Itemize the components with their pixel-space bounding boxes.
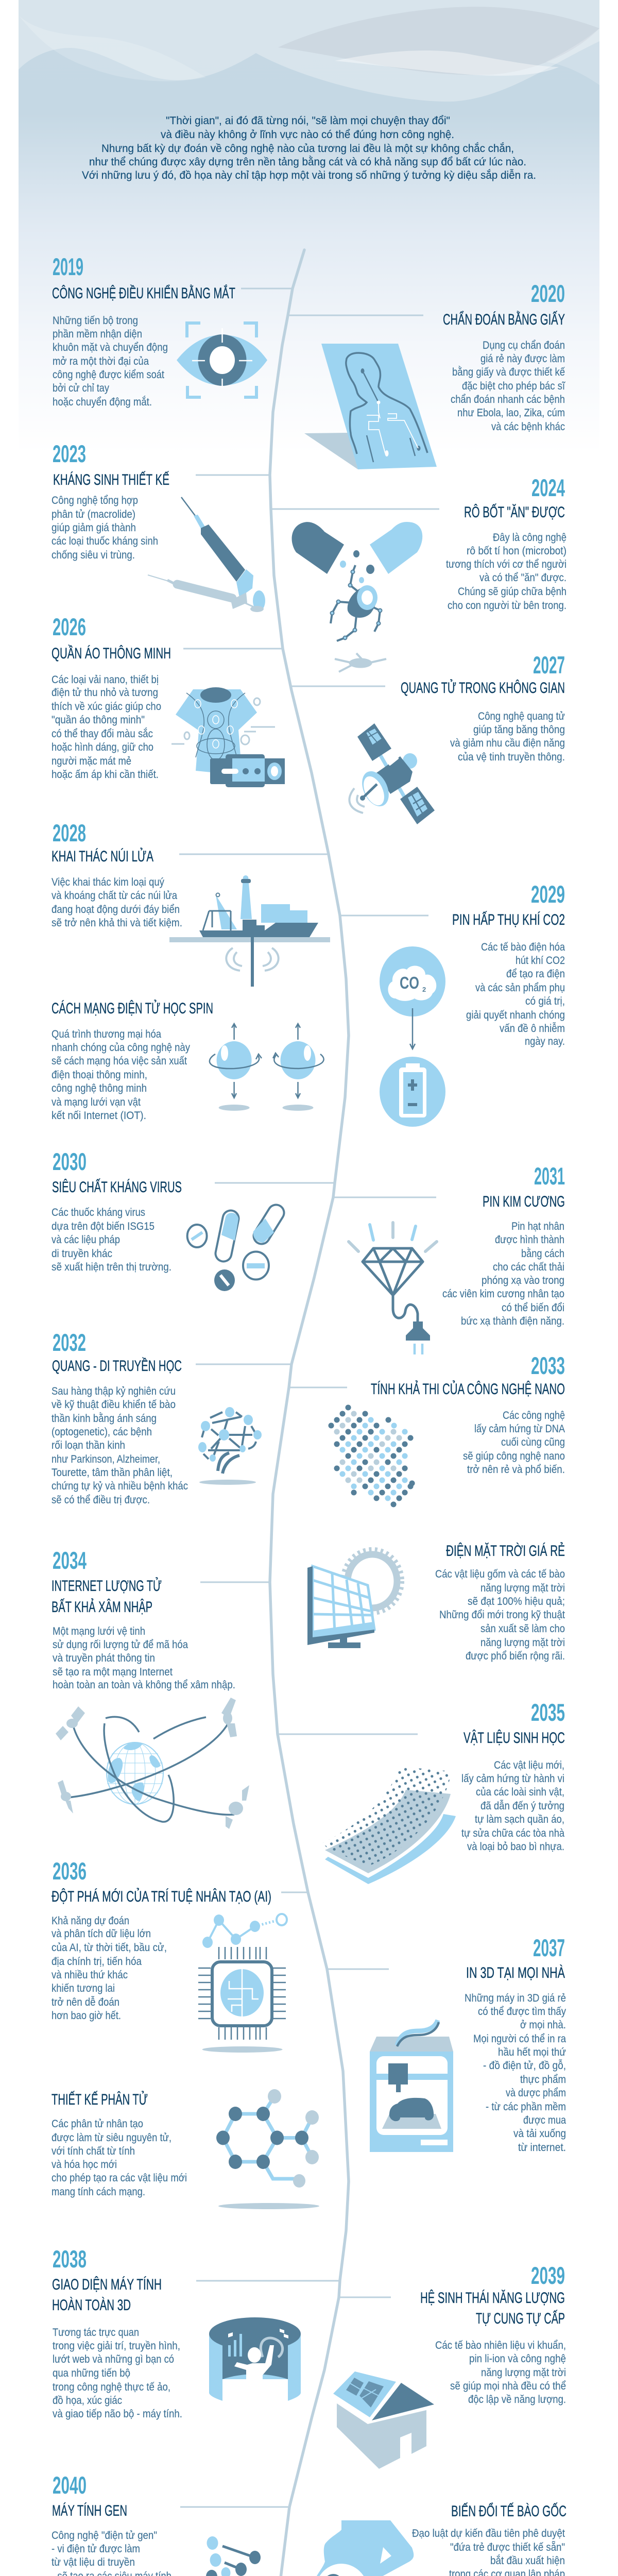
connector — [200, 1582, 269, 1583]
body text: thực phẩm — [520, 2074, 566, 2086]
connector — [340, 915, 428, 916]
panel: 2033 nanotechnology — [289, 1352, 565, 1504]
intro text: và điều này không ở lĩnh vực nào có thể đúng hơn công nghệ. — [161, 129, 454, 141]
body text: được phổ biến rộng rãi. — [466, 1650, 565, 1662]
connector — [196, 474, 270, 476]
body text — [52, 2530, 171, 2576]
panel: 2026 smart clothing — [52, 613, 285, 787]
body text: sẽ giúp mọi nhà đều có thể — [450, 2380, 566, 2392]
heading: IN 3D TẠI MỌI NHÀ — [466, 1964, 565, 1981]
connector — [196, 1363, 291, 1365]
body text — [52, 1385, 188, 1506]
body text: sẽ giúp công nghệ nano — [463, 1450, 565, 1462]
icon: molecule — [216, 2089, 319, 2209]
body text: và giảm nhu cầu điện năng — [450, 737, 565, 749]
connector — [241, 287, 291, 290]
heading: RÔ BỐT "ĂN" ĐƯỢC — [464, 503, 565, 521]
icon: material layers — [322, 1767, 456, 1884]
panel: 2027 space photonics — [291, 651, 565, 824]
body text: người mặc mát mẻ — [52, 755, 131, 767]
body text: có thể được tìm thấy — [478, 2006, 566, 2018]
body text: giá rẻ này được làm — [480, 353, 565, 365]
year: 2032 — [53, 1329, 86, 1356]
timeline curve — [270, 250, 349, 2576]
icon: electron spin — [210, 1024, 324, 1111]
intro text: Với những lưu ý đó, đồ họa này chỉ tập hợp một vài trong số những ý tưởng kỳ diệu sắp diễn ra. — [82, 170, 536, 181]
connector — [281, 1892, 308, 1893]
body text: công nghệ được kiểm soát — [53, 369, 164, 381]
body text: các viên kim cương nhân tạo — [442, 1288, 564, 1300]
panel: 2031 diamond battery — [334, 1162, 565, 1354]
panel: 2036 AI breakthrough — [52, 1857, 308, 2053]
body text — [451, 340, 565, 433]
body text: để tạo ra điện — [506, 968, 565, 980]
body text: và truyền phát thông tin — [53, 1652, 155, 1664]
panel: 2028 volcano mining — [52, 819, 330, 987]
body text: các loại thuốc kháng sinh — [52, 535, 158, 547]
icon: AI chip — [198, 1947, 286, 2053]
body text: chẩn đoán nhanh các bệnh — [451, 394, 565, 405]
heading: QUANG - DI TRUYỀN HỌC — [52, 1357, 182, 1375]
body text: được mua — [523, 2114, 566, 2126]
intro text: Nhưng bất kỳ dự đoán về công nghệ nào của tương lai đều là một sự không chắc chắn, — [101, 143, 514, 155]
icon: paper person — [304, 344, 437, 469]
year: 2024 — [531, 474, 565, 501]
panel: 2030 antivirals — [52, 1148, 335, 1291]
body text: tự làm sạch quần áo, — [475, 1814, 564, 1825]
year: 2033 — [531, 1352, 565, 1379]
panel: 2034 quantum internet — [52, 1547, 269, 1829]
year: 2038 — [53, 2245, 87, 2273]
year: 2035 — [531, 1699, 565, 1726]
body text: bằng cách — [521, 1248, 564, 1260]
year: 2036 — [53, 1857, 87, 1885]
body text: chứng tự kỷ và nhiều bệnh khác — [52, 1480, 188, 1492]
icon: CO2 cloud: CO — [400, 973, 419, 992]
body text: như Ebola, lao, Zika, cúm — [457, 407, 565, 419]
icon: neural tree — [198, 1407, 262, 1485]
body text: vấn đề ô nhiễm — [500, 1023, 565, 1035]
body text — [412, 2528, 565, 2576]
body text: sẽ đạt 100% hiệu quả; — [468, 1596, 565, 1607]
body text: Sau hàng thập kỷ nghiên cứu — [52, 1385, 176, 1397]
panel: 2029 CO2 battery — [340, 880, 565, 1127]
body text — [52, 1028, 190, 1122]
body text: về kỹ thuật điều khiển tế bào — [52, 1399, 176, 1411]
connector — [334, 1196, 436, 1198]
body text: tự sửa chữa các tòa nhà — [461, 1827, 564, 1839]
body text: ở mọi nhà. — [520, 2019, 566, 2031]
heading: MÁY TÍNH GEN — [52, 2502, 127, 2519]
body text: giúp giảm giá thành — [52, 522, 136, 534]
body text: khuôn mặt và chuyển động — [53, 342, 168, 353]
icon: mining ship — [169, 875, 330, 987]
body text: địa chính trị, tiến hóa — [52, 1956, 142, 1968]
icon: satellite — [349, 723, 435, 824]
body text: điện tử thu nhỏ và tương — [52, 687, 158, 699]
body text: lấy cảm hứng từ hành vi — [461, 1773, 564, 1785]
icon: CO2 cloud: 2 — [422, 986, 426, 993]
body text: đang hoạt động dưới đáy biển — [52, 904, 180, 916]
body text: và có thể "ăn" được. — [479, 572, 566, 584]
body text — [52, 1207, 171, 1273]
body text: Các vật liệu gốm và các tế bào — [435, 1568, 565, 1580]
body text: Pin hạt nhân — [511, 1221, 564, 1232]
body text: Các tế bào điện hóa — [481, 941, 565, 953]
page background top gradient — [19, 0, 599, 453]
intro text: như thể chúng được xây dựng trên nền tảng bằng cát và có khả năng sụp đổ bất cứ lúc nào. — [89, 156, 526, 168]
connector — [278, 1733, 418, 1735]
connector — [289, 1387, 347, 1388]
body text: và giao tiếp não bộ - máy tính. — [53, 2408, 182, 2420]
body text: Khả năng dự đoán — [52, 1915, 129, 1927]
body text: rối loạn thần kinh — [52, 1439, 125, 1451]
heading: TỰ CUNG TỰ CẤP — [476, 2310, 565, 2327]
body text: có thể biến đổi — [502, 1302, 564, 1314]
body text: bởi cử chỉ tay — [53, 382, 109, 394]
heading: HOÀN TOÀN 3D — [52, 2297, 131, 2314]
icon: globe with orbiting satellites — [56, 1698, 249, 1829]
heading: INTERNET LƯỢNG TỬ — [52, 1577, 162, 1595]
body text: cho con người từ bên trong. — [448, 600, 566, 612]
icon: syringes — [148, 497, 265, 612]
body text: di truyền khác — [52, 1248, 112, 1260]
body text: (optogenetic), các bệnh — [52, 1426, 152, 1438]
body text: trong công nghệ thực tế ảo, — [53, 2381, 170, 2393]
body text: và loại bỏ bao bì nhựa. — [467, 1841, 564, 1853]
intro text — [82, 115, 536, 181]
body text — [442, 1221, 564, 1327]
icon: DNA helix — [177, 2536, 261, 2576]
body text: Các thuốc kháng virus — [52, 1207, 145, 1218]
year: 2026 — [53, 613, 86, 640]
body text: rô bốt tí hon (microbot) — [467, 545, 566, 557]
panel: 2024 edible robots — [272, 474, 566, 672]
body text: Việc khai thác kim loại quý — [52, 876, 164, 888]
body text: lấy cảm hứng từ DNA — [474, 1423, 565, 1435]
body text: được hình thành — [495, 1234, 564, 1246]
year: 2040 — [53, 2471, 87, 2499]
panel: 2023 designer antibiotics — [52, 440, 270, 612]
heading: BIẾN ĐỔI TẾ BÀO GỐC — [451, 2502, 566, 2520]
body text: sẽ xuất hiện trên thị trường. — [52, 1261, 171, 1273]
body text: và khoáng chất từ các núi lửa — [52, 890, 177, 902]
body text: - vi điện tử được làm — [52, 2543, 140, 2555]
body text: trở nên rẻ và phổ biến. — [467, 1464, 565, 1476]
body text: và dược phẩm — [506, 2087, 566, 2099]
body text: sẽ trở nên khả thi và tiết kiệm. — [52, 917, 182, 929]
body text: và tải xuống — [513, 2128, 566, 2140]
connector — [183, 648, 283, 649]
body text: công nghệ thông minh — [52, 1082, 147, 1094]
icon: solar house — [333, 2371, 434, 2469]
body text: đặc biệt cho phép bác sĩ — [462, 380, 565, 392]
connector — [288, 314, 423, 316]
heading: ĐIỆN MẶT TRỜI GIÁ RẺ — [446, 1542, 565, 1560]
body text: Chúng sẽ giúp chữa bệnh — [458, 586, 566, 598]
body text: thần kinh bằng ánh sáng — [52, 1413, 157, 1425]
icon: battery — [380, 1057, 445, 1127]
body text: lướt web và những gì bạn có — [53, 2353, 174, 2365]
body text: như Parkinson, Alzheimer, — [52, 1453, 160, 1465]
body text — [435, 2340, 566, 2405]
body text: hút khí CO2 — [516, 955, 565, 967]
body text: - từ các phần mềm — [486, 2101, 566, 2113]
body text: hoặc chuyển động mắt. — [53, 396, 152, 408]
heading: KHÁNG SINH THIẾT KẾ — [53, 471, 169, 488]
body text — [435, 1568, 565, 1662]
icon: CO2 cloud — [380, 946, 445, 1016]
body text: giải quyết nhanh chóng — [466, 1009, 565, 1021]
intro text: "Thời gian", ai đó đã từng nói, "sẽ làm mọi chuyện thay đổi" — [166, 115, 450, 127]
body text: đồ họa, xúc giác — [53, 2395, 122, 2406]
body text: bắt đầu xuất hiện — [490, 2555, 565, 2567]
panel: stem cell modification — [312, 2502, 566, 2576]
body text: Những đổi mới trong kỹ thuật — [439, 1609, 565, 1621]
body text: hoặc hình dáng, giữ cho — [52, 741, 153, 753]
body text: Đạo luật dự kiến đầu tiên phê duyệt — [412, 2528, 565, 2539]
body text: Một mạng lưới vệ tinh — [53, 1625, 145, 1637]
icon: pregnant silhouette with fetus — [312, 2520, 414, 2576]
body text — [53, 315, 168, 408]
body text: Các công nghệ — [503, 1410, 565, 1421]
heading: ĐỘT PHÁ MỚI CỦA TRÍ TUỆ NHÂN TẠO (AI) — [52, 1888, 271, 1905]
icon: eye — [177, 321, 267, 399]
panel: 2020 paper diagnostics — [288, 280, 565, 469]
year: 2019 — [53, 253, 83, 280]
body text — [463, 1410, 565, 1476]
body text: Dụng cụ chẩn đoán — [483, 340, 565, 351]
body text: sẽ có thể điều trị được. — [52, 1494, 150, 1506]
body text: Những máy in 3D giá rẻ — [465, 1992, 566, 2004]
connector — [339, 2297, 391, 2298]
body text: hầu hết mọi thứ — [498, 2046, 566, 2058]
heading: PIN HẤP THỤ KHÍ CO2 — [452, 911, 565, 928]
body text: giúp tăng băng thông — [473, 724, 565, 736]
icon: line chart — [202, 1914, 287, 1948]
body text: khiến tương lai — [52, 1982, 115, 1994]
connector — [291, 685, 385, 687]
panel: 2037 home 3D printing — [328, 1934, 566, 2154]
body text: cho các chất thải — [493, 1261, 564, 1273]
body text: và hóa học mới — [52, 2159, 117, 2171]
year: 2039 — [531, 2262, 565, 2289]
connector — [180, 2506, 289, 2508]
body text: sẽ cách mạng hóa việc sản xuất — [52, 1055, 187, 1067]
panel: molecular design — [52, 2089, 319, 2209]
heading: VẬT LIỆU SINH HỌC — [464, 1730, 565, 1747]
body text: Quá trình thương mại hóa — [52, 1028, 161, 1040]
body text: bức xạ thành điện năng. — [461, 1315, 564, 1327]
body text: điện thoại thông minh, — [52, 1069, 147, 1081]
body text: và phân tích dữ liệu lớn — [52, 1928, 151, 1940]
heading: KHAI THÁC NÚI LỬA — [52, 848, 153, 865]
body text: kết nối Internet (IOT). — [52, 1110, 146, 1122]
panel: cheap solar power — [307, 1542, 565, 1662]
year: 2037 — [533, 1934, 565, 1961]
body text: Các phân tử nhân tạo — [52, 2118, 143, 2130]
body text: tương thích với cơ thể người — [446, 558, 566, 570]
year: 2030 — [53, 1148, 87, 1175]
body text: năng lượng mặt trời — [481, 2367, 566, 2379]
year: 2034 — [53, 1547, 87, 1574]
body text: từ internet. — [518, 2142, 566, 2154]
body text: cuối cùng cũng — [501, 1436, 565, 1448]
body text: sử dụng rối lượng tử để mã hóa — [53, 1639, 188, 1651]
body text: bằng giấy và được thiết kế — [452, 366, 565, 378]
year: 2031 — [534, 1162, 565, 1190]
year: 2029 — [531, 880, 565, 908]
body text: nhanh chóng của công nghệ này — [52, 1042, 190, 1054]
arrow: CO2 to battery — [410, 1008, 415, 1049]
body text: Công nghệ "điện tử gen" — [52, 2530, 157, 2541]
connector — [272, 508, 439, 510]
icon: nano dots — [331, 1408, 412, 1504]
panel: 2032 optogenetics — [52, 1329, 291, 1506]
year: 2020 — [531, 280, 565, 307]
body text: "quần áo thông minh" — [52, 714, 145, 726]
body text — [446, 532, 566, 612]
body text — [52, 1915, 167, 2022]
body text: Tương tác trực quan — [53, 2327, 139, 2338]
icon: solar panel and sun — [307, 1549, 402, 1648]
icon: pills — [187, 1213, 276, 1291]
icon: 3D printer — [370, 2020, 453, 2152]
body text — [53, 2327, 182, 2420]
icon: immersive screen — [209, 2317, 301, 2401]
body text: Công nghệ quang tử — [478, 710, 565, 722]
body text: pin li-ion và công nghệ — [469, 2353, 566, 2365]
body text: thích về xúc giác giúp cho — [52, 701, 161, 713]
body text — [450, 710, 565, 763]
heading — [52, 2276, 162, 2314]
connector — [215, 1182, 335, 1184]
body text — [465, 1992, 566, 2154]
body text: Tourette, tâm thần phân liệt, — [52, 1467, 173, 1479]
body text: từ vật liệu di truyền — [52, 2556, 135, 2568]
connector — [196, 2280, 340, 2281]
heading: CÔNG NGHỆ ĐIỀU KHIỂN BẰNG MẮT — [52, 284, 235, 302]
body text: và các bệnh khác — [491, 421, 565, 433]
body text: phóng xạ vào trong — [482, 1275, 564, 1286]
body text: có giá trị, — [525, 995, 565, 1007]
panel: 2019 eye control — [52, 253, 291, 408]
body text: năng lượng mặt trời — [480, 1582, 565, 1594]
body text: đã dẫn đến ý tưởng — [480, 1800, 564, 1812]
panel: 2039 energy ecosystem — [333, 2262, 566, 2469]
body text: và các sản phẩm phụ — [475, 982, 565, 994]
icon: capsule robot — [292, 522, 422, 641]
body text: trong việc giải trí, truyền hình, — [53, 2340, 180, 2352]
panel: spin electronics — [52, 999, 324, 1122]
body text: phần mềm nhận diện — [53, 328, 142, 340]
body text: hơn bao giờ hết. — [52, 2010, 121, 2022]
heading — [52, 1577, 162, 1616]
panel: 2038 3D interfaces — [52, 2245, 340, 2420]
connector — [328, 1968, 389, 1970]
heading: PIN KIM CƯƠNG — [483, 1193, 565, 1210]
body text: năng lượng mặt trời — [480, 1637, 565, 1649]
heading: QUẦN ÁO THÔNG MINH — [52, 645, 171, 662]
body text: "đứa trẻ được thiết kế sẵn" — [450, 2541, 565, 2553]
body text — [53, 1625, 235, 1691]
body text: - đồ điện tử, đồ gỗ, — [483, 2060, 566, 2072]
body text — [52, 876, 182, 929]
body text — [52, 495, 158, 561]
body text: dựa trên đột biến ISG15 — [52, 1221, 154, 1232]
body text: Các tế bào nhiên liệu vi khuẩn, — [435, 2340, 566, 2351]
body text: Đây là công nghệ — [493, 532, 566, 544]
body text: và nhiều thứ khác — [52, 1969, 128, 1981]
icon: drone shadow — [335, 653, 386, 672]
body text: phân tử (macrolide) — [52, 509, 135, 520]
body text: mang tính cách mạng. — [52, 2186, 145, 2198]
body text: của các loài sinh vật, — [476, 1786, 564, 1798]
body text: độc lập về năng lượng. — [468, 2394, 566, 2405]
body text: của AI, từ thời tiết, bầu cử, — [52, 1942, 167, 1954]
body text: và mạng lưới vạn vật — [52, 1096, 141, 1108]
heading: THIẾT KẾ PHÂN TỬ — [52, 2091, 148, 2108]
body text: có thể thay đổi màu sắc — [52, 728, 153, 740]
body text: chống siêu vi trùng. — [52, 549, 135, 561]
heading: CÁCH MẠNG ĐIỆN TỬ HỌC SPIN — [52, 999, 213, 1017]
heading — [420, 2290, 565, 2327]
heading: CHẨN ĐOÁN BẰNG GIẤY — [443, 311, 565, 328]
body text: của vệ tinh truyền thông. — [458, 751, 565, 763]
year: 2028 — [53, 819, 86, 846]
body text: Mọi người có thể in ra — [473, 2033, 566, 2045]
body text: Các vật liệu mới, — [494, 1759, 564, 1771]
heading: BẤT KHẢ XÂM NHẬP — [52, 1598, 152, 1616]
connector — [179, 853, 329, 855]
body text: mở ra một thời đại của — [53, 355, 149, 367]
body text — [466, 941, 565, 1047]
heading: SIÊU CHẤT KHÁNG VIRUS — [52, 1178, 182, 1196]
year: 2023 — [53, 440, 86, 467]
body text: và các liệu pháp — [52, 1234, 120, 1246]
body text: cho phép tạo ra các vật liệu mới — [52, 2172, 187, 2184]
body text: hoàn toàn an toàn và không thể xâm nhập. — [53, 1679, 235, 1691]
body text: sẽ tạo ra một mạng Internet — [53, 1666, 173, 1678]
body text — [461, 1759, 564, 1853]
year: 2027 — [533, 651, 565, 679]
icon: diamond plug — [349, 1223, 437, 1354]
body text — [52, 2118, 187, 2198]
body text: trở nên dễ đoán — [52, 1996, 119, 2008]
panel: 2035 biomaterials — [278, 1699, 565, 1884]
body text: được làm từ siêu nguyên tử, — [52, 2132, 171, 2144]
body text: ngày nay. — [525, 1036, 565, 1047]
body text: Công nghệ tổng hợp — [52, 495, 138, 506]
body text: hoặc ấm áp khi cần thiết. — [52, 769, 159, 781]
body text — [52, 674, 161, 781]
body text: Các loại vải nano, thiết bị — [52, 674, 159, 686]
body text: Những tiến bộ trong — [53, 315, 138, 327]
top wave decoration — [19, 0, 599, 101]
body text: qua những tiến bộ — [53, 2367, 130, 2379]
panel: 2040 genetic computer — [52, 2471, 289, 2576]
icon: smart shirt and device — [171, 687, 285, 787]
body text: sản xuất sẽ làm cho — [480, 1623, 565, 1635]
heading: GIAO DIỆN MÁY TÍNH — [52, 2276, 162, 2293]
body text: với tính chất từ tính — [52, 2145, 135, 2157]
